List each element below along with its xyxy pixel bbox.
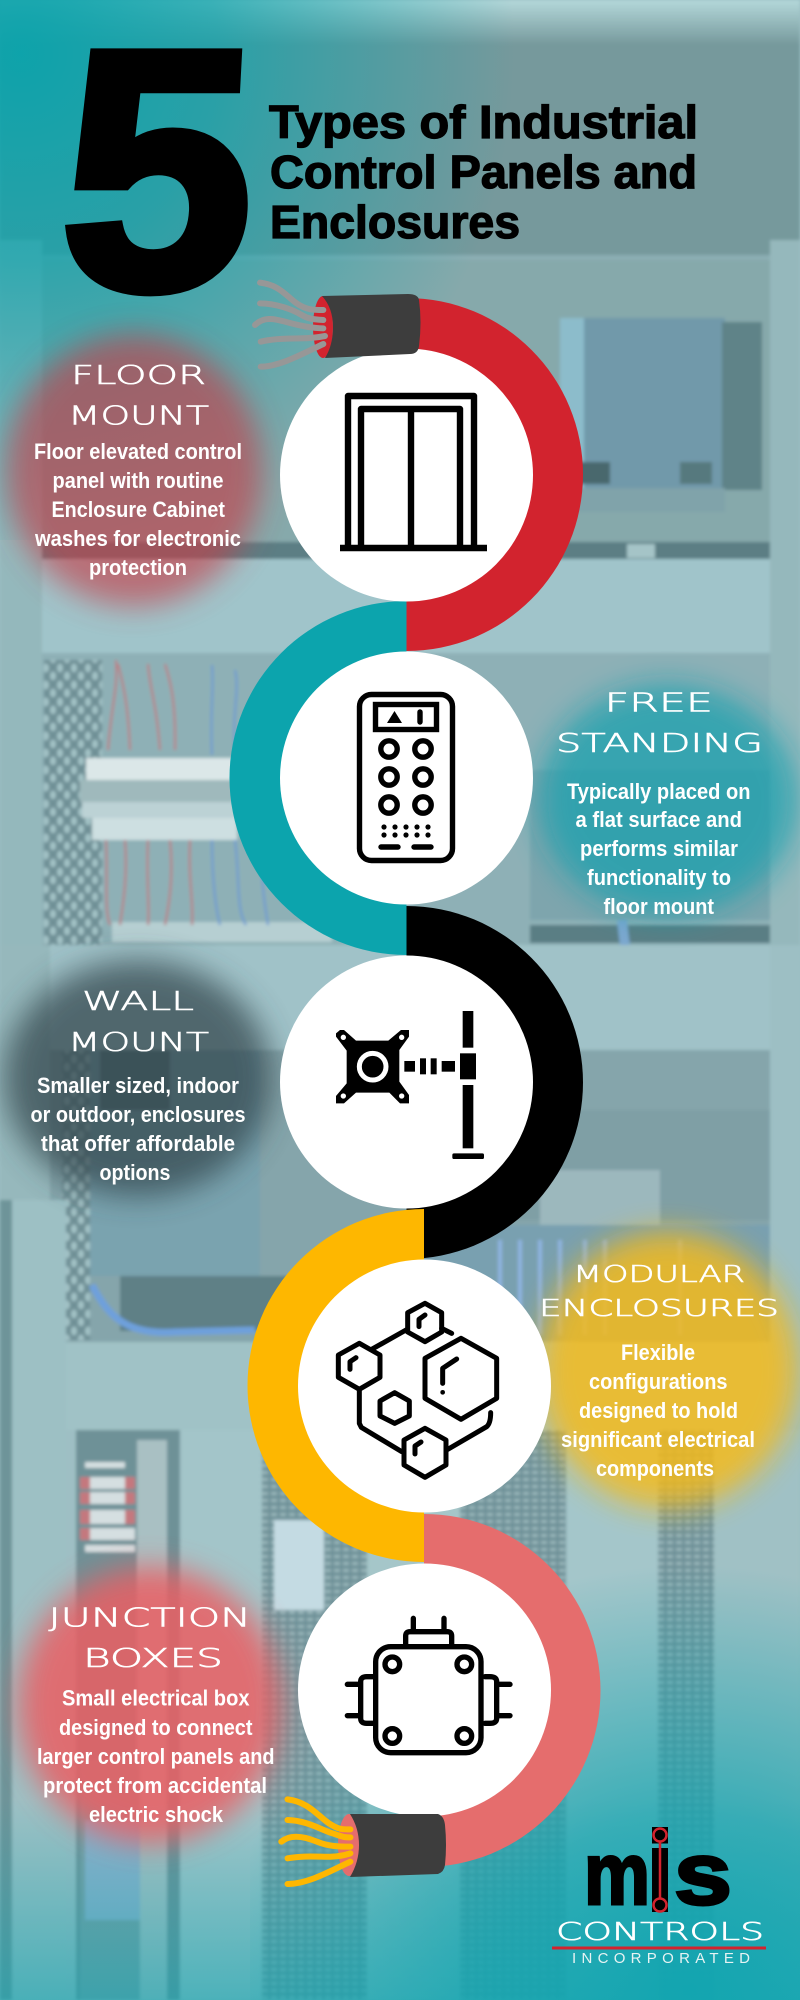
blob: modular enclosures background xyxy=(538,1232,798,1508)
text block: floor mount: panel with routine xyxy=(52,468,224,493)
panel: floor mount circle and icon xyxy=(280,348,533,602)
icon: modular hexagons xyxy=(338,1303,497,1477)
semicircle: pink, junction boxes xyxy=(424,1514,600,1867)
text block: wall mount: options xyxy=(100,1160,170,1185)
arrow: bottom cable with yellow wires xyxy=(281,1799,446,1884)
semicircle: teal, free standing xyxy=(229,601,406,955)
logo letter i with red circuit trace xyxy=(652,1827,668,1912)
text block: junction boxes: larger control panels and xyxy=(37,1744,274,1769)
yellow wires xyxy=(281,1799,350,1884)
text block: junction boxes: BOXES xyxy=(83,1644,223,1674)
panel: junction boxes circle and icon xyxy=(298,1564,551,1816)
logo letter s: s xyxy=(674,1824,732,1923)
grey wires xyxy=(255,283,325,367)
text block: junction boxes: electric shock xyxy=(89,1802,224,1827)
text block: wall mount: or outdoor, enclosures xyxy=(30,1102,246,1127)
logo word controls: CONTROLS xyxy=(556,1917,764,1946)
text block: junction boxes xyxy=(37,1604,274,1827)
text block: junction boxes: Small electrical box xyxy=(62,1686,250,1710)
blob: junction boxes background xyxy=(18,1567,282,1843)
text block: free standing: Typically placed on xyxy=(567,779,750,804)
title: Enclosures xyxy=(270,196,520,248)
arrow: top cable with grey wires xyxy=(255,283,420,367)
text block: junction boxes: JUNCTION xyxy=(48,1604,251,1634)
text block: floor mount: Floor elevated control xyxy=(34,439,242,464)
logo: MIS Controls Incorporated xyxy=(552,1824,766,1967)
logo red rule xyxy=(552,1946,766,1950)
text block: floor mount: washes for electronic xyxy=(34,526,241,551)
text block: free standing: STANDING xyxy=(556,729,763,759)
text block: free standing: performs similar xyxy=(580,836,738,861)
text block: floor mount: FLOOR xyxy=(71,361,206,391)
title xyxy=(269,96,698,248)
icon: free standing control pendant xyxy=(360,694,452,860)
text block: wall mount: that offer affordable xyxy=(41,1131,235,1156)
text block: modular enclosures: components xyxy=(596,1456,714,1481)
blob: floor mount background xyxy=(6,334,262,606)
text block: modular enclosures: significant electrical xyxy=(561,1427,755,1452)
cable jacket xyxy=(322,294,420,358)
text block: free standing xyxy=(556,688,763,919)
text block: free standing: FREE xyxy=(604,688,713,718)
panel: wall mount circle and icon xyxy=(280,956,533,1208)
logo word incorporated: INCORPORATED xyxy=(572,1950,750,1967)
text block: floor mount: Enclosure Cabinet xyxy=(52,497,226,522)
logo letter m: m xyxy=(584,1824,650,1923)
text block: free standing: floor mount xyxy=(604,894,715,919)
text block: modular enclosures: Flexible xyxy=(621,1340,695,1365)
panel: free standing circle and icon xyxy=(280,652,533,904)
icon: floor mount door cabinet xyxy=(340,396,487,548)
blob: wall mount background xyxy=(4,960,272,1196)
blob: free standing background xyxy=(538,684,798,916)
cable end pink core xyxy=(338,1814,360,1876)
text block: junction boxes: protect from accidental xyxy=(43,1773,267,1798)
text block: modular enclosures: configurations xyxy=(589,1369,728,1394)
cable end red core xyxy=(313,296,333,358)
text block: floor mount xyxy=(34,361,242,580)
text block: wall mount: Smaller sized, indoor xyxy=(37,1073,239,1098)
text block: floor mount: MOUNT xyxy=(68,402,209,432)
text block: free standing: functionality to xyxy=(587,865,731,890)
title: Types of Industrial xyxy=(269,96,698,148)
panel: modular enclosures circle and icon xyxy=(298,1260,551,1512)
cable jacket xyxy=(350,1814,446,1877)
semicircle: black, wall mount xyxy=(406,906,583,1259)
title: Control Panels and xyxy=(270,146,697,198)
text block: modular enclosures: ENCLOSURES xyxy=(539,1296,779,1322)
text block: wall mount xyxy=(30,987,246,1185)
semicircle: red, floor mount xyxy=(406,298,583,651)
text block: wall mount: MOUNT xyxy=(68,1028,209,1058)
icon: wall mount bracket xyxy=(336,1011,484,1159)
text block: modular enclosures: designed to hold xyxy=(579,1398,738,1423)
text block: wall mount: WALL xyxy=(82,987,194,1017)
text block: modular enclosures: MODULAR xyxy=(573,1262,745,1288)
text block: free standing: a flat surface and xyxy=(576,807,742,832)
icon: junction box xyxy=(347,1618,510,1753)
semicircle: yellow, modular enclosures xyxy=(248,1209,424,1562)
text block: junction boxes: designed to connect xyxy=(59,1715,253,1740)
text block: modular enclosures xyxy=(539,1262,779,1481)
text block: floor mount: protection xyxy=(89,555,187,580)
